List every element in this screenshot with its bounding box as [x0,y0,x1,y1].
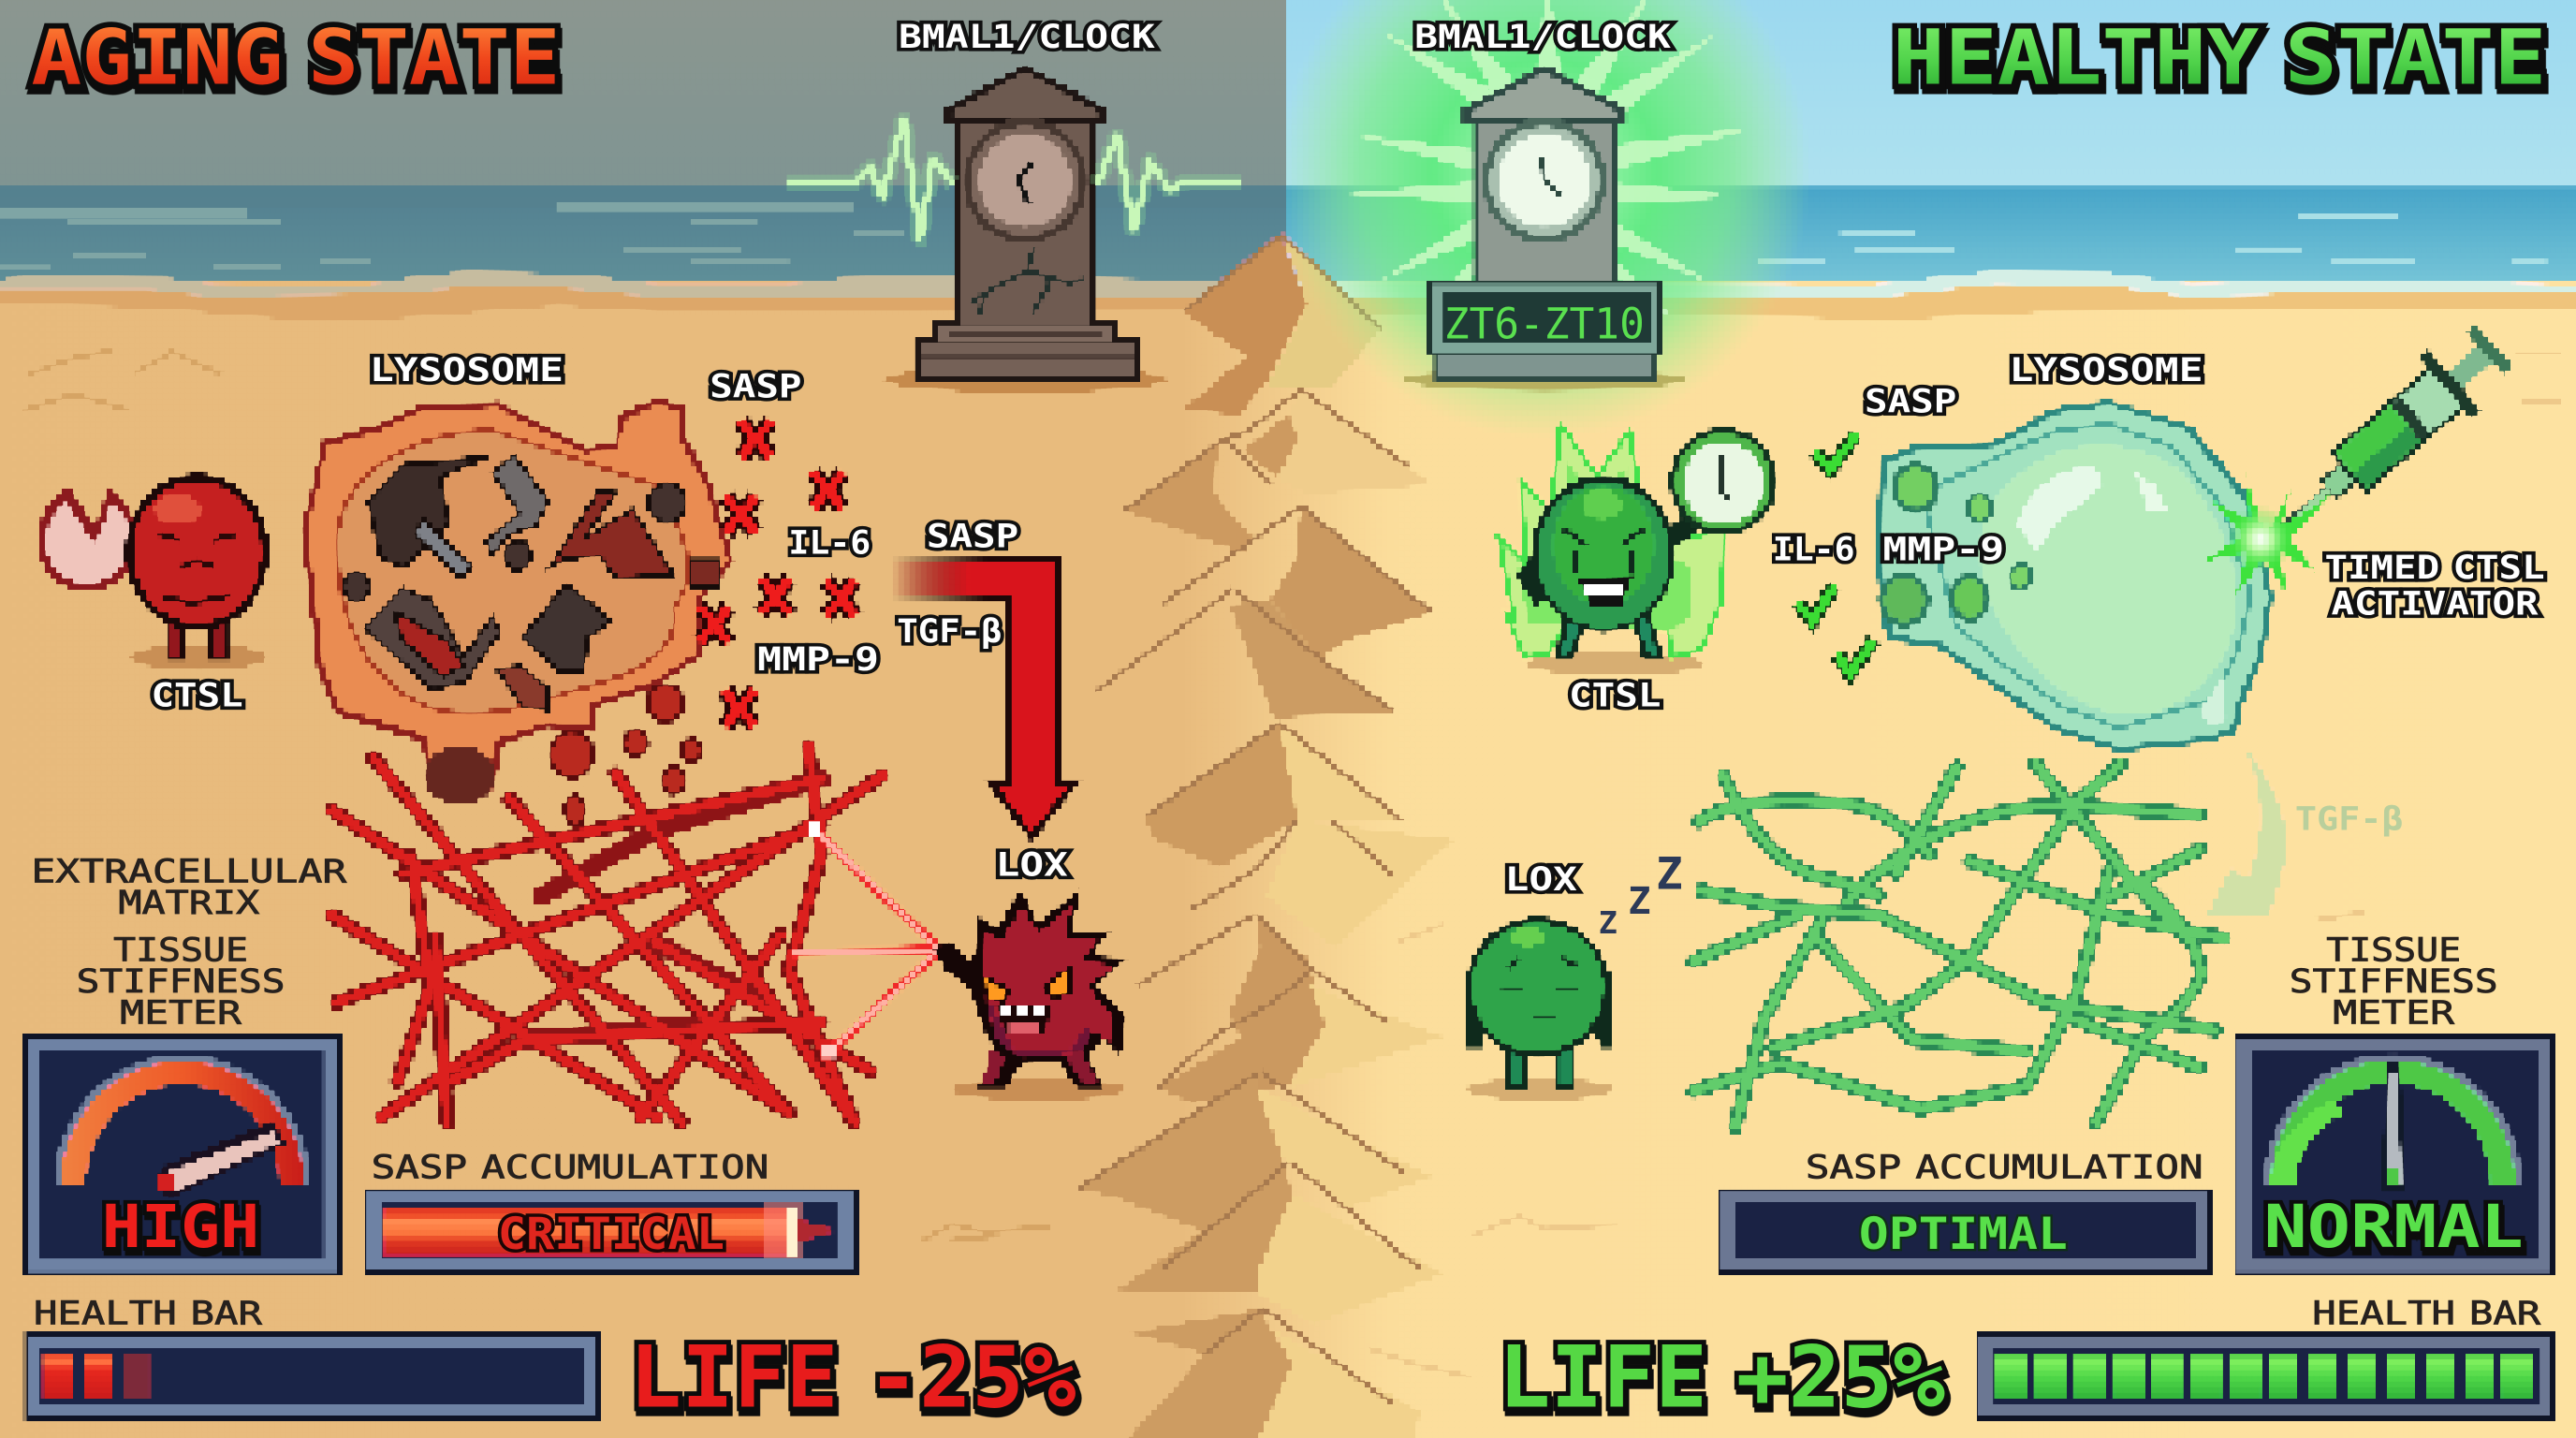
label: CTSL, aging: CTSL [151,677,243,715]
icon: sleeping green LOX character [1466,917,1614,1101]
label: clock display window: ZT6-ZT10 [1444,300,1645,349]
icon: sleeping Z letters: Z [1656,849,1683,901]
title: aging state: AGING STATE [31,15,560,103]
label: SASP accumulation, healthy: SASP ACCUMULATION [1806,1148,2203,1186]
value: SASP optimal: OPTIMAL [1859,1209,2068,1260]
icon: LOX crosslinking laser beams [792,823,940,1058]
label: tissue stiffness meter, aging: STIFFNESS [77,962,285,1001]
icon: ruptured lysosome with debris [300,398,735,805]
icon: angry red LOX monster [933,888,1127,1101]
label: timed CTSL activator: ACTIVATOR [2331,584,2539,623]
value: stiffness high: HIGH [102,1192,259,1261]
healthy clock green glow [1288,0,1823,460]
label: health bar, aging: HEALTH BAR [34,1295,263,1333]
label: extracellular matrix [31,852,347,922]
gauge needle [2380,1062,2407,1193]
label: tissue stiffness meter, aging [77,932,285,1032]
icon: sleeping Z letters: Z [1599,904,1617,941]
value: SASP critical: CRITICAL [498,1209,724,1260]
background: aging beach, left half [0,0,1288,289]
label: LOX, healthy: LOX [1505,860,1577,899]
label: IL-6, healthy: IL-6 [1773,530,1855,568]
label: healthy lysosome: LYSOSOME [2009,351,2203,389]
gauge needle [154,1121,285,1199]
label: extracellular matrix: MATRIX [118,884,259,922]
label: MMP-9, aging: MMP-9 [757,640,879,679]
panel: healthy SASP accumulation bar [1719,1188,2211,1277]
icon: green checkmarks on SASP factors [1797,433,1875,674]
icon: healthy mint lysosome [1876,399,2274,753]
label: timed CTSL activator [2324,549,2545,623]
label: faded TGF-beta: TGF-β [2295,800,2404,838]
chart: stiff crosslinked red extracellular matrix [332,746,882,1123]
panel: aging health bar [24,1331,600,1421]
label: extracellular matrix: EXTRACELLULAR [31,852,347,890]
panel: healthy health bar [1976,1331,2554,1421]
label: SASP, aging: SASP [710,368,801,406]
icon: energised green CTSL character with clock [1499,424,1778,675]
label: aging lysosome: LYSOSOME [370,351,564,389]
background: healthy beach, right half [1288,0,2576,289]
label: SASP on arrow: SASP [927,517,1018,555]
icon: red X marks on SASP factors [700,420,856,726]
arrow: faded TGF-beta signal [2206,746,2287,917]
title: healthy state: HEALTHY STATE [1893,15,2546,103]
label: timed CTSL activator: TIMED CTSL [2324,549,2545,587]
label: CTSL, healthy: CTSL [1569,677,1661,715]
icon: sleeping Z letters [1599,849,1683,941]
label: tissue stiffness meter, healthy [2290,932,2498,1032]
arrow: SASP and TGF-beta signal to LOX [890,555,1083,843]
label: tissue stiffness meter, aging: TISSUE [113,932,248,970]
icon: sleeping Z letters: Z [1628,879,1651,923]
panel: SASP accumulation critical bar [365,1188,857,1277]
label: tissue stiffness meter, healthy: METER [2333,993,2455,1032]
label: SASP, healthy: SASP [1865,383,1956,421]
icon: injection spark [2202,473,2330,598]
label: aging clock: BMAL1/CLOCK [899,18,1155,56]
icon: timed CTSL activator syringe [2244,315,2522,572]
label: SASP accumulation, aging: SASP ACCUMULATION [372,1148,768,1186]
panel: aging tissue stiffness gauge [23,1032,342,1277]
label: tissue stiffness meter, aging: METER [120,993,242,1032]
value: life plus 25 percent: LIFE +25% [1499,1327,1945,1427]
icon: sad red CTSL character with broken clock [37,473,270,670]
label: health bar, healthy: HEALTH BAR [2312,1295,2541,1333]
icon: glowing BMAL1/CLOCK tower with ZT6-ZT10 display (healthy) [1403,64,1686,391]
icon: leaking SASP droplets [550,685,701,825]
value: stiffness normal: NORMAL [2264,1192,2524,1261]
label: tissue stiffness meter, healthy: STIFFNESS [2290,962,2498,1001]
label: TGF-beta on arrow: TGF-β [897,612,1003,651]
label: tissue stiffness meter, healthy: TISSUE [2326,932,2461,970]
icon: cracked BMAL1/CLOCK tower (aging) [884,64,1166,392]
value: life minus 25 percent: LIFE -25% [629,1327,1076,1427]
health bar segments [1996,1352,2532,1400]
panel: healthy tissue stiffness gauge [2234,1032,2554,1277]
sand ripples [23,350,2563,1377]
chart: flexible green extracellular matrix [1694,764,2224,1127]
label: IL-6, aging: IL-6 [788,523,871,562]
label: healthy clock: BMAL1/CLOCK [1414,18,1671,56]
label: MMP-9, healthy: MMP-9 [1882,530,2004,568]
label: LOX, aging: LOX [996,845,1068,884]
sand dunes along central divide [1079,235,1454,1438]
icon: weak ECG pulse [788,118,1240,240]
